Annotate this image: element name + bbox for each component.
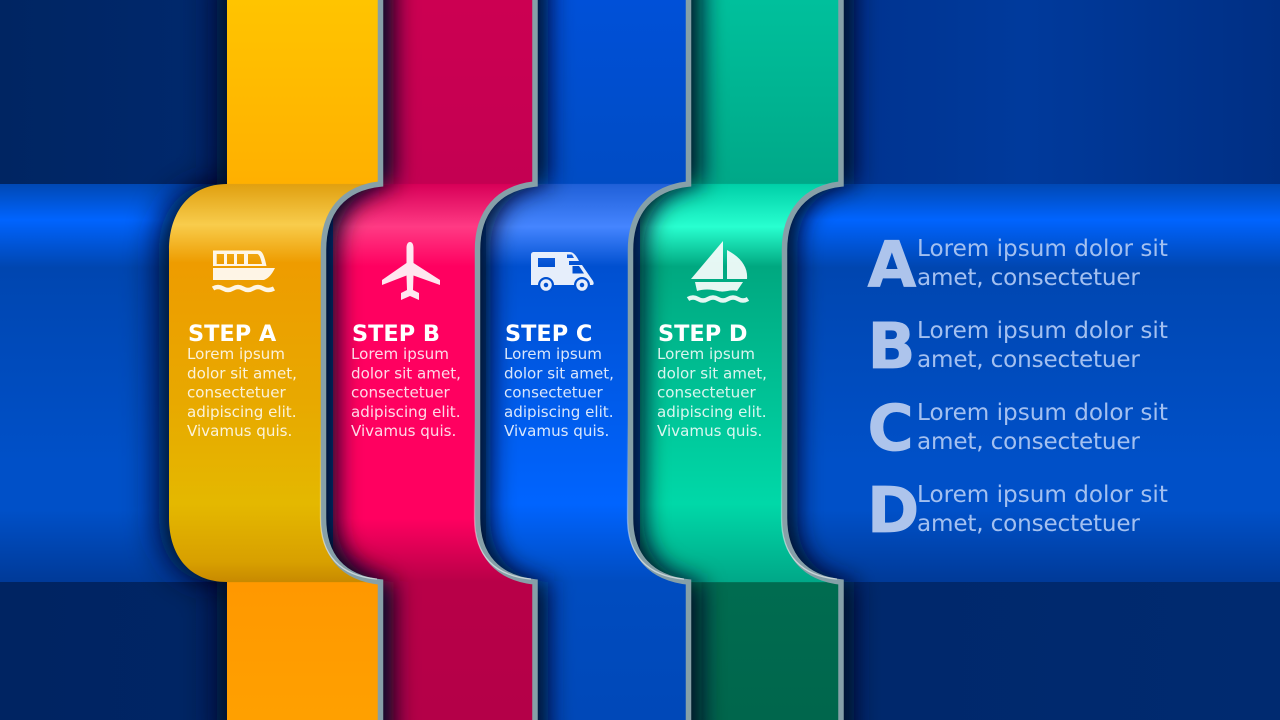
icon: sailboat [688, 241, 748, 300]
text: step B body: Vivamus quis. [351, 422, 456, 440]
legend item A: Lorem ipsum dolor sit [917, 236, 1168, 262]
icon: boat [213, 250, 275, 290]
heading: step C: STEP C [505, 321, 592, 347]
text: step D body: Lorem ipsum [657, 345, 755, 363]
heading: step D: STEP D [658, 321, 748, 347]
text: step B body: dolor sit amet, [351, 364, 461, 382]
text: step B body: consectetuer [351, 384, 451, 402]
text: step A body: dolor sit amet, [187, 364, 297, 382]
legend item C: Lorem ipsum dolor sit [917, 400, 1168, 426]
step C content [504, 252, 614, 440]
legend item C [868, 392, 1168, 465]
legend item D: Lorem ipsum dolor sit [917, 482, 1168, 508]
legend item C: amet, consectetuer [917, 429, 1140, 455]
text: step D body: adipiscing elit. [657, 403, 766, 421]
panel: step D ribbon [640, 0, 854, 720]
text: step D body: Vivamus quis. [657, 422, 762, 440]
text: step A body: consectetuer [187, 384, 287, 402]
text: step C body: adipiscing elit. [504, 403, 614, 421]
legend item C: C [868, 392, 914, 465]
legend item B [868, 310, 1168, 383]
legend item A [868, 228, 1168, 302]
text: step C body: consectetuer [504, 384, 604, 402]
legend item A: amet, consectetuer [917, 265, 1140, 291]
step B content [351, 242, 461, 440]
text: step A body: Lorem ipsum [187, 345, 285, 363]
legend list [867, 228, 1168, 547]
text: step B body: Lorem ipsum [351, 345, 449, 363]
text: step A body: Vivamus quis. [187, 422, 292, 440]
icon: camper van [531, 252, 594, 293]
heading: step B: STEP B [352, 321, 440, 347]
panel: step C ribbon [486, 0, 702, 720]
text: step D body: dolor sit amet, [657, 364, 767, 382]
legend item D [867, 474, 1168, 547]
panel: step B ribbon [333, 0, 548, 720]
legend item A: A [868, 228, 916, 302]
panel: step A ribbon [159, 0, 394, 720]
text: step C body: Lorem ipsum [504, 345, 602, 363]
text: step D body: consectetuer [657, 384, 757, 402]
legend item D: amet, consectetuer [917, 511, 1140, 537]
icon: airplane [382, 242, 440, 300]
legend item D: D [867, 474, 919, 547]
step D content [657, 241, 767, 440]
legend item B: B [868, 310, 916, 383]
legend item B: amet, consectetuer [917, 347, 1140, 373]
text: step A body: adipiscing elit. [187, 403, 296, 421]
step A content [187, 250, 297, 440]
heading: step A: STEP A [188, 321, 277, 347]
text: step C body: Vivamus quis. [504, 422, 609, 440]
legend item B: Lorem ipsum dolor sit [917, 318, 1168, 344]
text: step B body: adipiscing elit. [351, 403, 460, 421]
text: step C body: dolor sit amet, [504, 364, 614, 382]
